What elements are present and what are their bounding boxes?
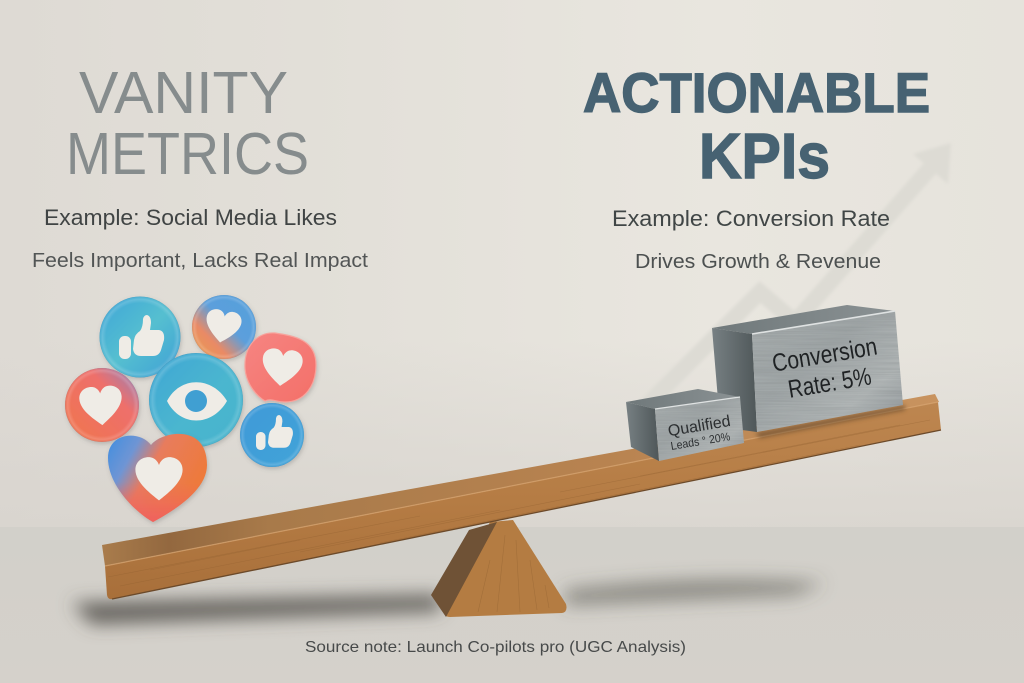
- fulcrum dark face: [431, 522, 497, 617]
- block label: Rate: 5%: [786, 362, 873, 404]
- title: vanity metrics: METRICS: [66, 121, 309, 187]
- icon cluster: social reactions: [65, 295, 316, 522]
- fulcrum: [431, 520, 566, 617]
- small block front: [655, 397, 744, 461]
- title: vanity metrics: VANITY: [79, 60, 288, 126]
- block: qualified leads: [626, 389, 744, 461]
- small block side: [626, 402, 659, 461]
- small block label: [667, 413, 732, 453]
- shadow under block: [755, 405, 905, 438]
- floor shadows: [72, 580, 825, 624]
- block label: Conversion: [770, 333, 879, 378]
- text: social media example: Example: Social Media Likes: [44, 205, 337, 230]
- plank top surface: [102, 394, 939, 566]
- title: vanity metrics: [66, 60, 309, 187]
- block front: [752, 311, 903, 432]
- title: actionable KPIs: ACTIONABLE: [583, 61, 930, 124]
- icon: small thumbs up bubble: [240, 403, 304, 467]
- block top: [712, 305, 895, 334]
- plank front face: [105, 402, 941, 599]
- icon: coral heart speech bubble: [245, 333, 316, 402]
- text: KPI caption: Drives Growth & Revenue: [635, 250, 881, 273]
- seesaw plank: [102, 394, 941, 599]
- text: conversion example: Example: Conversion Rate: [612, 206, 890, 231]
- fulcrum lit face: [444, 520, 566, 617]
- icon: large thumbs up bubble: [100, 296, 180, 378]
- small block top: [626, 389, 740, 409]
- text: vanity caption: Feels Important, Lacks Real Impact: [32, 249, 368, 272]
- background wall: [0, 0, 1024, 527]
- block label: [770, 333, 879, 404]
- floor: [0, 527, 1024, 683]
- wall lower fade: [0, 340, 1024, 527]
- icon: large gradient heart: [108, 434, 207, 522]
- source note: Source note: Launch Co-pilots pro (UGC Analysis): [305, 639, 686, 656]
- icon: eye bubble: [149, 353, 243, 447]
- small block label: Qualified: [667, 413, 732, 440]
- block: conversion rate: [712, 305, 905, 438]
- small block label: Leads ° 20%: [670, 431, 731, 453]
- icon: gradient heart bubble: [192, 295, 256, 359]
- background growth arrow: [640, 143, 951, 412]
- title: actionable KPIs: KPIs: [699, 120, 830, 192]
- icon: left heart bubble: [65, 368, 139, 442]
- block side: [712, 328, 757, 432]
- title: actionable KPIs: [583, 61, 930, 192]
